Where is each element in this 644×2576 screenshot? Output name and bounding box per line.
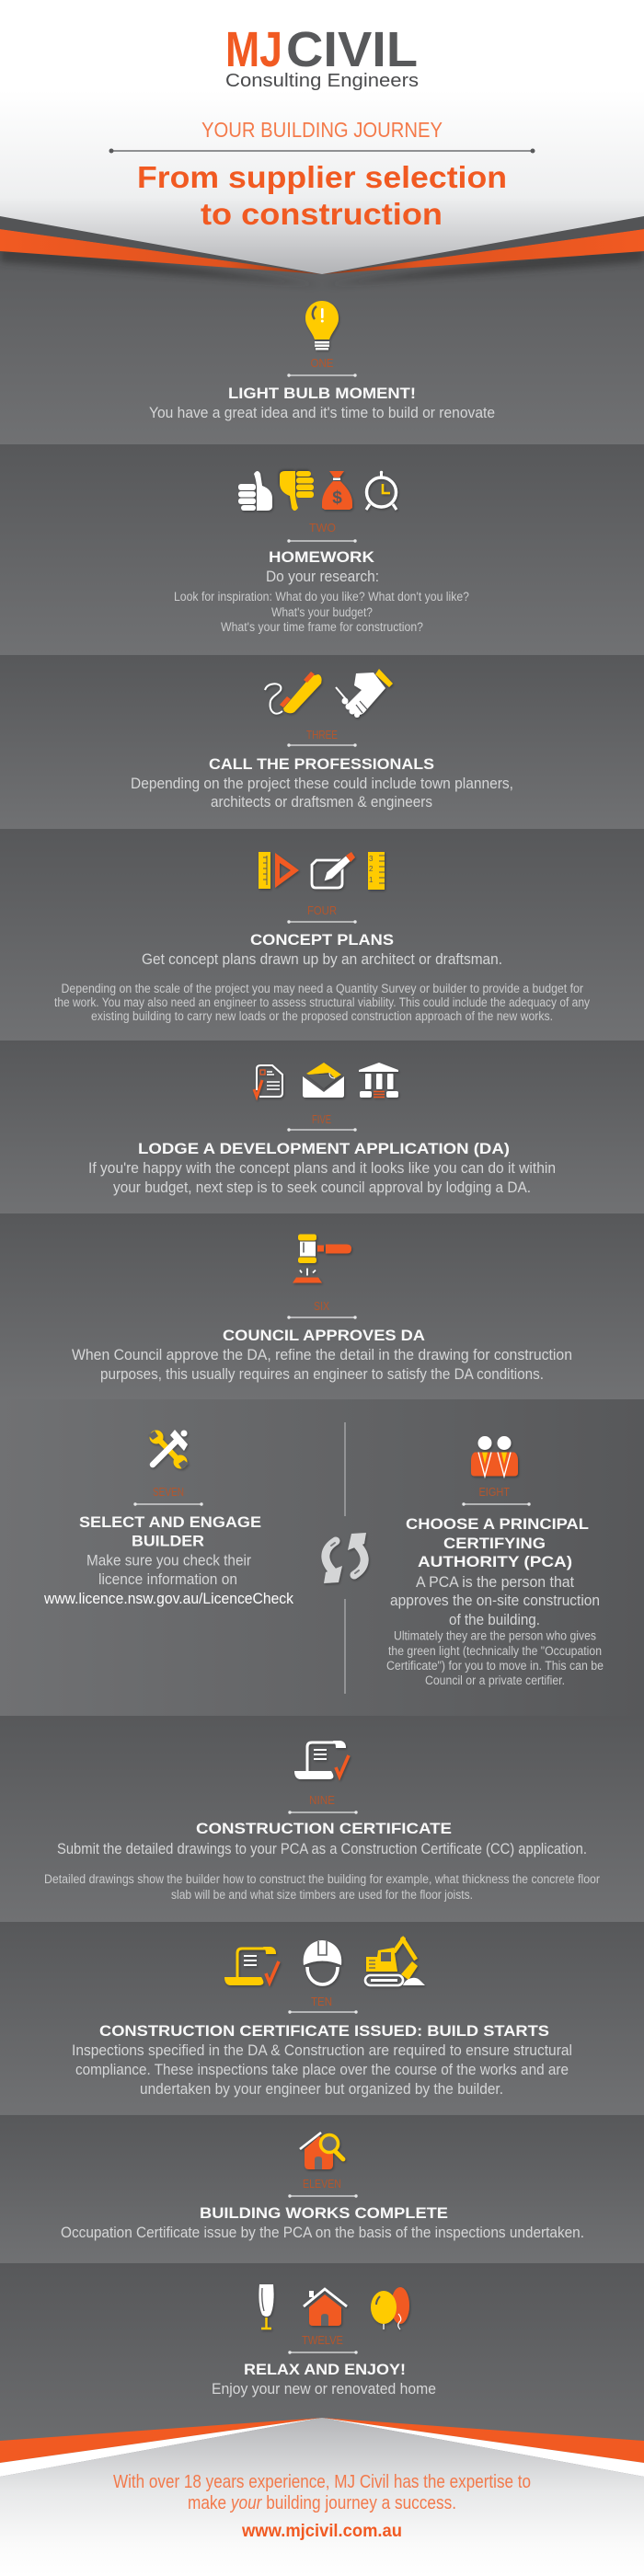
- panel: step six council approves: [0, 1213, 644, 1399]
- detail text: the green light (technically the "Occupation: [388, 1644, 602, 1658]
- body text: Do your research:: [266, 568, 379, 585]
- panel: step nine construction certificate: [0, 1716, 644, 1922]
- body text: undertaken by your engineer but organized by the builder.: [140, 2080, 503, 2098]
- step number: NINE: [309, 1794, 335, 1807]
- heading: AUTHORITY (PCA): [418, 1554, 572, 1570]
- body text: Inspections specified in the DA & Construction are required to ensure structural: [72, 2041, 572, 2059]
- icon: yellow scroll with tick: [224, 1947, 279, 1985]
- step seven: [43, 1430, 293, 1607]
- heading: BUILDER: [132, 1533, 204, 1549]
- body text: What's your budget?: [271, 605, 373, 619]
- heading: RELAX AND ENJOY!: [244, 2362, 406, 2378]
- icon: money bag: $: [332, 489, 342, 508]
- panel: step eleven building works complete: [0, 2115, 644, 2263]
- body text: You have a great idea and it's time to build or renovate: [149, 404, 495, 421]
- logo: [225, 22, 419, 91]
- body text: When Council approve the DA, refine the detail in the drawing for construction: [72, 1346, 572, 1363]
- body text: licence information on: [98, 1570, 237, 1588]
- panel: footer: [0, 2418, 644, 2576]
- step eight: [386, 1436, 604, 1687]
- icon: scale ruler: 1: [369, 876, 374, 884]
- step number: ONE: [311, 357, 333, 370]
- panel: steps seven and eight: [0, 1399, 644, 1716]
- panel: step one light bulb moment: [0, 212, 644, 444]
- icon: notepad and pencil: [312, 852, 355, 888]
- panel: step two homework: [0, 444, 644, 655]
- detail text: slab will be and what size timbers are used for the floor joists.: [171, 1888, 473, 1902]
- icon: hard hat: [304, 1940, 341, 1984]
- step number: TWO: [309, 522, 336, 535]
- step number: FIVE: [312, 1113, 331, 1126]
- heading: CONCEPT PLANS: [250, 932, 394, 949]
- body text: purposes, this usually requires an engineer to satisfy the DA conditions.: [100, 1365, 544, 1383]
- body text: If you're happy with the concept plans and it looks like you can do it within: [88, 1159, 556, 1177]
- body text: [390, 1573, 600, 1628]
- step number: SIX: [314, 1300, 330, 1313]
- icon: money bag: [322, 471, 352, 510]
- title: to construction: [201, 197, 443, 231]
- icon: scale ruler: [368, 852, 385, 890]
- body text: [174, 568, 469, 634]
- icon: thumb down: [280, 471, 314, 511]
- body text: Depending on the project these could include town planners,: [131, 775, 513, 792]
- heading: [79, 1514, 261, 1549]
- title: [137, 160, 507, 231]
- body text: Enjoy your new or renovated home: [212, 2380, 436, 2398]
- heading: BUILDING WORKS COMPLETE: [200, 2205, 448, 2222]
- detail text: [54, 982, 590, 1023]
- icon: champagne glass: [259, 2284, 274, 2329]
- icon: refresh arrows: [324, 1533, 366, 1583]
- heading: LIGHT BULB MOMENT!: [228, 385, 416, 402]
- body text: www.licence.nsw.gov.au/LicenceCheck: [43, 1590, 293, 1607]
- icon: house: [304, 2289, 347, 2326]
- icon: open envelope: [303, 1063, 344, 1098]
- panel: step five lodge a development application: [0, 1041, 644, 1213]
- panel: header: [0, 0, 644, 285]
- heading: CHOOSE A PRINCIPAL: [406, 1516, 589, 1533]
- detail text: [386, 1628, 604, 1687]
- detail text: Detailed drawings show the builder how to construct the building for example, what thickness the concrete floor: [44, 1872, 600, 1886]
- body text: [131, 775, 513, 811]
- icon: scroll with tick: [294, 1741, 349, 1779]
- heading: COUNCIL APPROVES DA: [223, 1328, 425, 1344]
- subtitle: YOUR BUILDING JOURNEY: [201, 118, 443, 142]
- heading: CONSTRUCTION CERTIFICATE: [196, 1821, 452, 1837]
- icon: balloons: [371, 2287, 409, 2329]
- icon: checklist document: [254, 1065, 282, 1097]
- heading: [406, 1516, 589, 1570]
- body text: What's your time frame for construction?: [221, 620, 423, 634]
- body text: [72, 1346, 572, 1383]
- body text: Look for inspiration: What do you like? What don't you like?: [174, 590, 469, 604]
- body text: A PCA is the person that: [416, 1573, 574, 1591]
- panel: step three call the professionals: [0, 655, 644, 829]
- closing statement: make your building journey a success.: [188, 2493, 456, 2513]
- icon: house with magnifier: [300, 2133, 343, 2169]
- footer ribbons: [0, 2418, 644, 2576]
- icon: telephone: [265, 672, 322, 714]
- heading: CALL THE PROFESSIONALS: [209, 756, 434, 773]
- detail text: Certificate") for you to move in. This can be: [386, 1659, 604, 1673]
- body text: [43, 1551, 293, 1607]
- heading: CONSTRUCTION CERTIFICATE ISSUED: BUILD STARTS: [99, 2023, 549, 2040]
- closing statement: [113, 2472, 531, 2513]
- detail text: Depending on the scale of the project you may need a Quantity Survey or builder to provide a budget for: [61, 982, 583, 995]
- step number: FOUR: [307, 904, 337, 917]
- icon: ruler: [259, 852, 270, 889]
- step number: THREE: [306, 729, 338, 742]
- heading: SELECT AND ENGAGE: [79, 1514, 261, 1531]
- body text: Make sure you check their: [86, 1551, 251, 1570]
- icon: handshake: [336, 669, 393, 718]
- step number: ELEVEN: [303, 2178, 341, 2191]
- website: www.mjcivil.com.au: [241, 2522, 402, 2541]
- logo: MJ: [225, 22, 282, 77]
- heading: LODGE A DEVELOPMENT APPLICATION (DA): [138, 1141, 510, 1157]
- icon: gavel: [293, 1235, 351, 1282]
- detail text: existing building to carry new loads or the proposed construction approach of the new works.: [91, 1009, 553, 1023]
- heading: CERTIFYING: [443, 1535, 546, 1552]
- closing statement: With over 18 years experience, MJ Civil has the expertise to: [113, 2472, 531, 2492]
- step number: TEN: [311, 1995, 332, 2008]
- body text: [72, 2041, 572, 2098]
- body text: your budget, next step is to seek council approval by lodging a DA.: [113, 1179, 531, 1196]
- panel: step four concept plans: [0, 829, 644, 1041]
- body text: of the building.: [449, 1611, 540, 1628]
- icon: light bulb: [305, 301, 339, 350]
- step number: EIGHT: [478, 1486, 510, 1499]
- body text: approves the on-site construction: [390, 1592, 600, 1609]
- detail text: [44, 1872, 600, 1902]
- title: From supplier selection: [137, 160, 507, 194]
- heading: HOMEWORK: [269, 549, 374, 566]
- body text: architects or draftsmen & engineers: [211, 793, 432, 811]
- logo: CIVIL: [286, 22, 418, 77]
- body text: Get concept plans drawn up by an architect or draftsman.: [142, 950, 502, 968]
- step number: TWELVE: [302, 2334, 343, 2347]
- icon: scale ruler: 2: [369, 865, 374, 873]
- icon: council building: [359, 1063, 398, 1098]
- header ribbons: [0, 0, 644, 285]
- detail text: the work. You may also need an engineer to assess structural viability. This could include the adequacy of any: [54, 995, 590, 1009]
- icon: clock: [366, 471, 397, 510]
- panel: step ten build starts: [0, 1922, 644, 2115]
- body text: Occupation Certificate issue by the PCA on the basis of the inspections undertaken.: [61, 2224, 584, 2241]
- icon: excavator: [365, 1937, 425, 1985]
- icon: two certifiers: [471, 1436, 518, 1476]
- body text: compliance. These inspections take place over the course of the works and are: [75, 2061, 569, 2078]
- icon: hammer and wrench: [148, 1430, 189, 1469]
- icon: set square: [275, 853, 299, 888]
- step number: SEVEN: [153, 1486, 184, 1499]
- panel: step twelve relax and enjoy: [0, 2263, 644, 2484]
- body text: [88, 1159, 556, 1196]
- icon: thumb up: [238, 471, 272, 511]
- detail text: Council or a private certifier.: [425, 1673, 565, 1687]
- logo: Consulting Engineers: [225, 71, 419, 91]
- detail text: Ultimately they are the person who gives: [394, 1628, 596, 1643]
- icon: scale ruler: 3: [369, 855, 374, 863]
